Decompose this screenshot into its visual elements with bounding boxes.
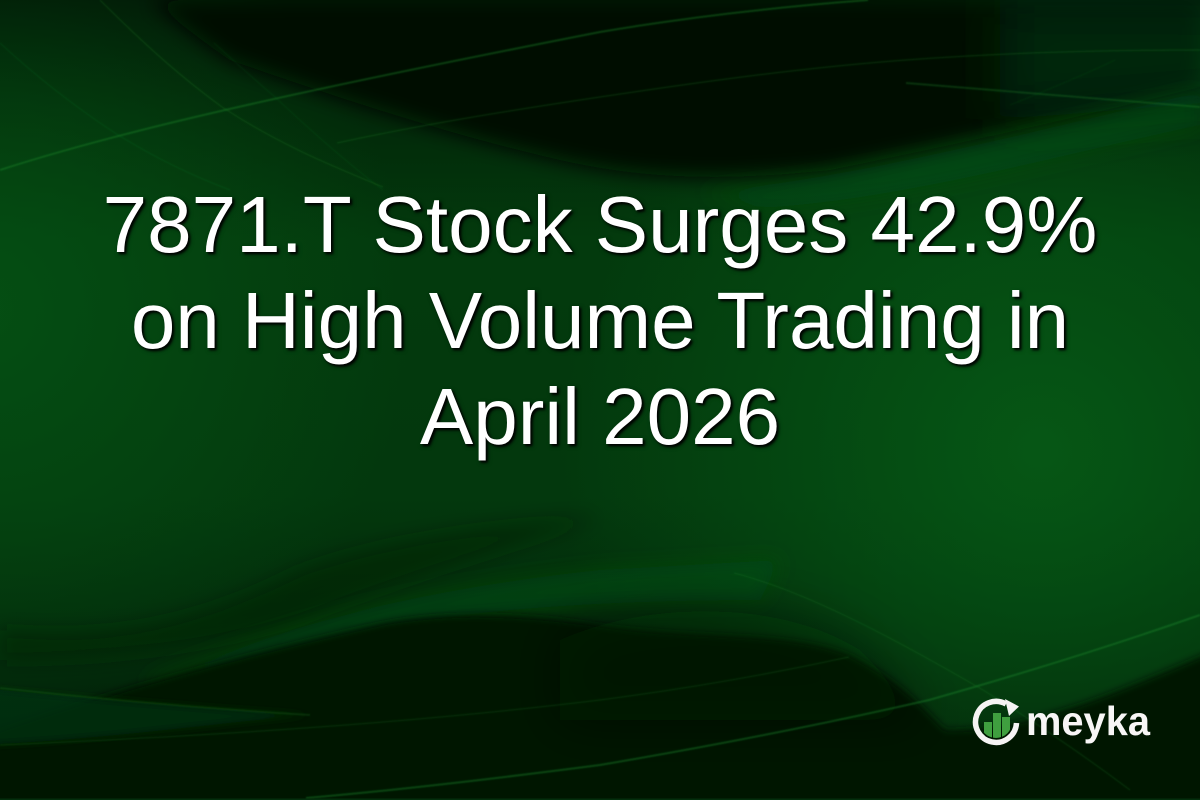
title: April 2026: [420, 372, 780, 461]
soft fold lower left: [0, 518, 600, 660]
soft shadow right of lower blob: [560, 611, 930, 720]
dark lower blob: [0, 615, 1200, 800]
wordmark: meyka: [1026, 698, 1151, 744]
bottom edge line: [0, 798, 1200, 800]
title: 7871.T Stock Surges 42.9%: [103, 180, 1097, 269]
lower-left green wedge below line: [0, 688, 310, 745]
icon: circular arrow with bars: [976, 699, 1019, 742]
title: on High Volume Trading in: [131, 276, 1069, 365]
logo: meyka: [972, 698, 1151, 746]
light band under top blob: [700, 92, 1200, 208]
green band above dark lower blob: [150, 560, 780, 690]
lighter top-right haze: [1000, 0, 1200, 120]
title: [103, 180, 1098, 464]
dark top blob: [150, 0, 1200, 177]
